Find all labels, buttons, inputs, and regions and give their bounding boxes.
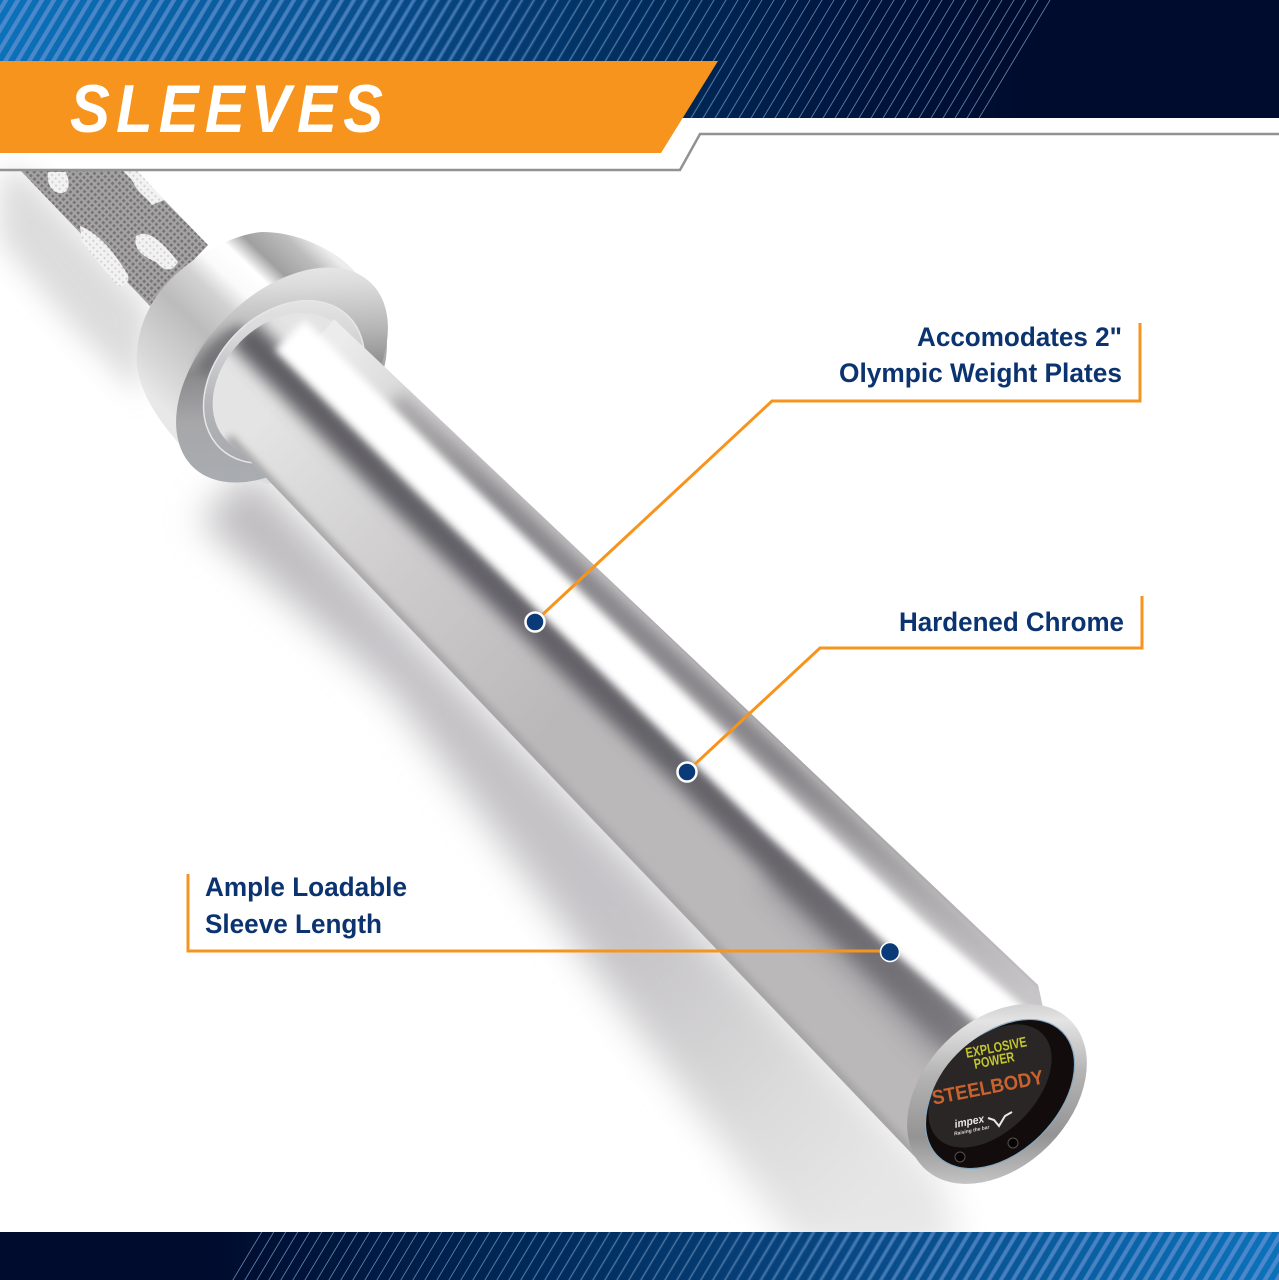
- end cap label: EXPLOSIVE: [964, 1033, 1028, 1061]
- main highlight: [290, 335, 1030, 1040]
- end cap label: [930, 1033, 1046, 1137]
- marker dot: [880, 942, 900, 962]
- end cap screws: [955, 1138, 1018, 1162]
- chrome sleeve: [212, 316, 1042, 1158]
- end cap label: Raising the bar: [954, 1124, 991, 1137]
- barbell shadow: [0, 172, 960, 1250]
- end cap disc: [905, 1001, 1075, 1171]
- upper strip tone: [334, 330, 1042, 1006]
- top banner: [0, 0, 1279, 118]
- callout: Olympic plates: [526, 322, 1140, 632]
- upper dark band: [395, 400, 1040, 1000]
- callout text: Hardened Chrome: [899, 607, 1124, 637]
- soft dark spread near end: [780, 863, 960, 1045]
- title banner: [0, 61, 718, 153]
- collar front face: [136, 227, 428, 523]
- title: SLEEVES: [70, 70, 389, 147]
- collar recess ring: [171, 269, 397, 495]
- knurled shaft: [20, 170, 208, 306]
- main dark band: [240, 330, 1000, 1075]
- knurl light patches: [48, 170, 178, 286]
- end cap recess: [897, 991, 1103, 1197]
- collar: [136, 227, 428, 523]
- callout text: [839, 322, 1122, 388]
- callout text: Accomodates 2": [917, 322, 1122, 352]
- banner stripes: [223, 1232, 1279, 1280]
- lower edge tone: [228, 438, 917, 1159]
- callout text: Olympic Weight Plates: [839, 358, 1122, 388]
- callout text: Ample Loadable: [205, 872, 407, 902]
- banner stripes: [0, 0, 1059, 118]
- marker dot: [678, 762, 696, 782]
- marker dot: [526, 612, 544, 632]
- callout: Ample Loadable Sleeve Length: [188, 872, 900, 962]
- end cap label: POWER: [972, 1048, 1016, 1072]
- collar outer cylinder: [137, 232, 387, 484]
- callout text: [205, 872, 407, 939]
- callout text: Sleeve Length: [205, 909, 382, 939]
- header outline: [0, 134, 1279, 170]
- end cap rim: [872, 969, 1122, 1219]
- white header backing: [0, 118, 690, 153]
- bottom banner: [0, 1232, 1279, 1280]
- end cap label: impex: [954, 1113, 986, 1131]
- end cap label: STEELBODY: [930, 1066, 1046, 1110]
- callout: Hardened Chrome: [678, 596, 1142, 782]
- end cap: [872, 969, 1122, 1219]
